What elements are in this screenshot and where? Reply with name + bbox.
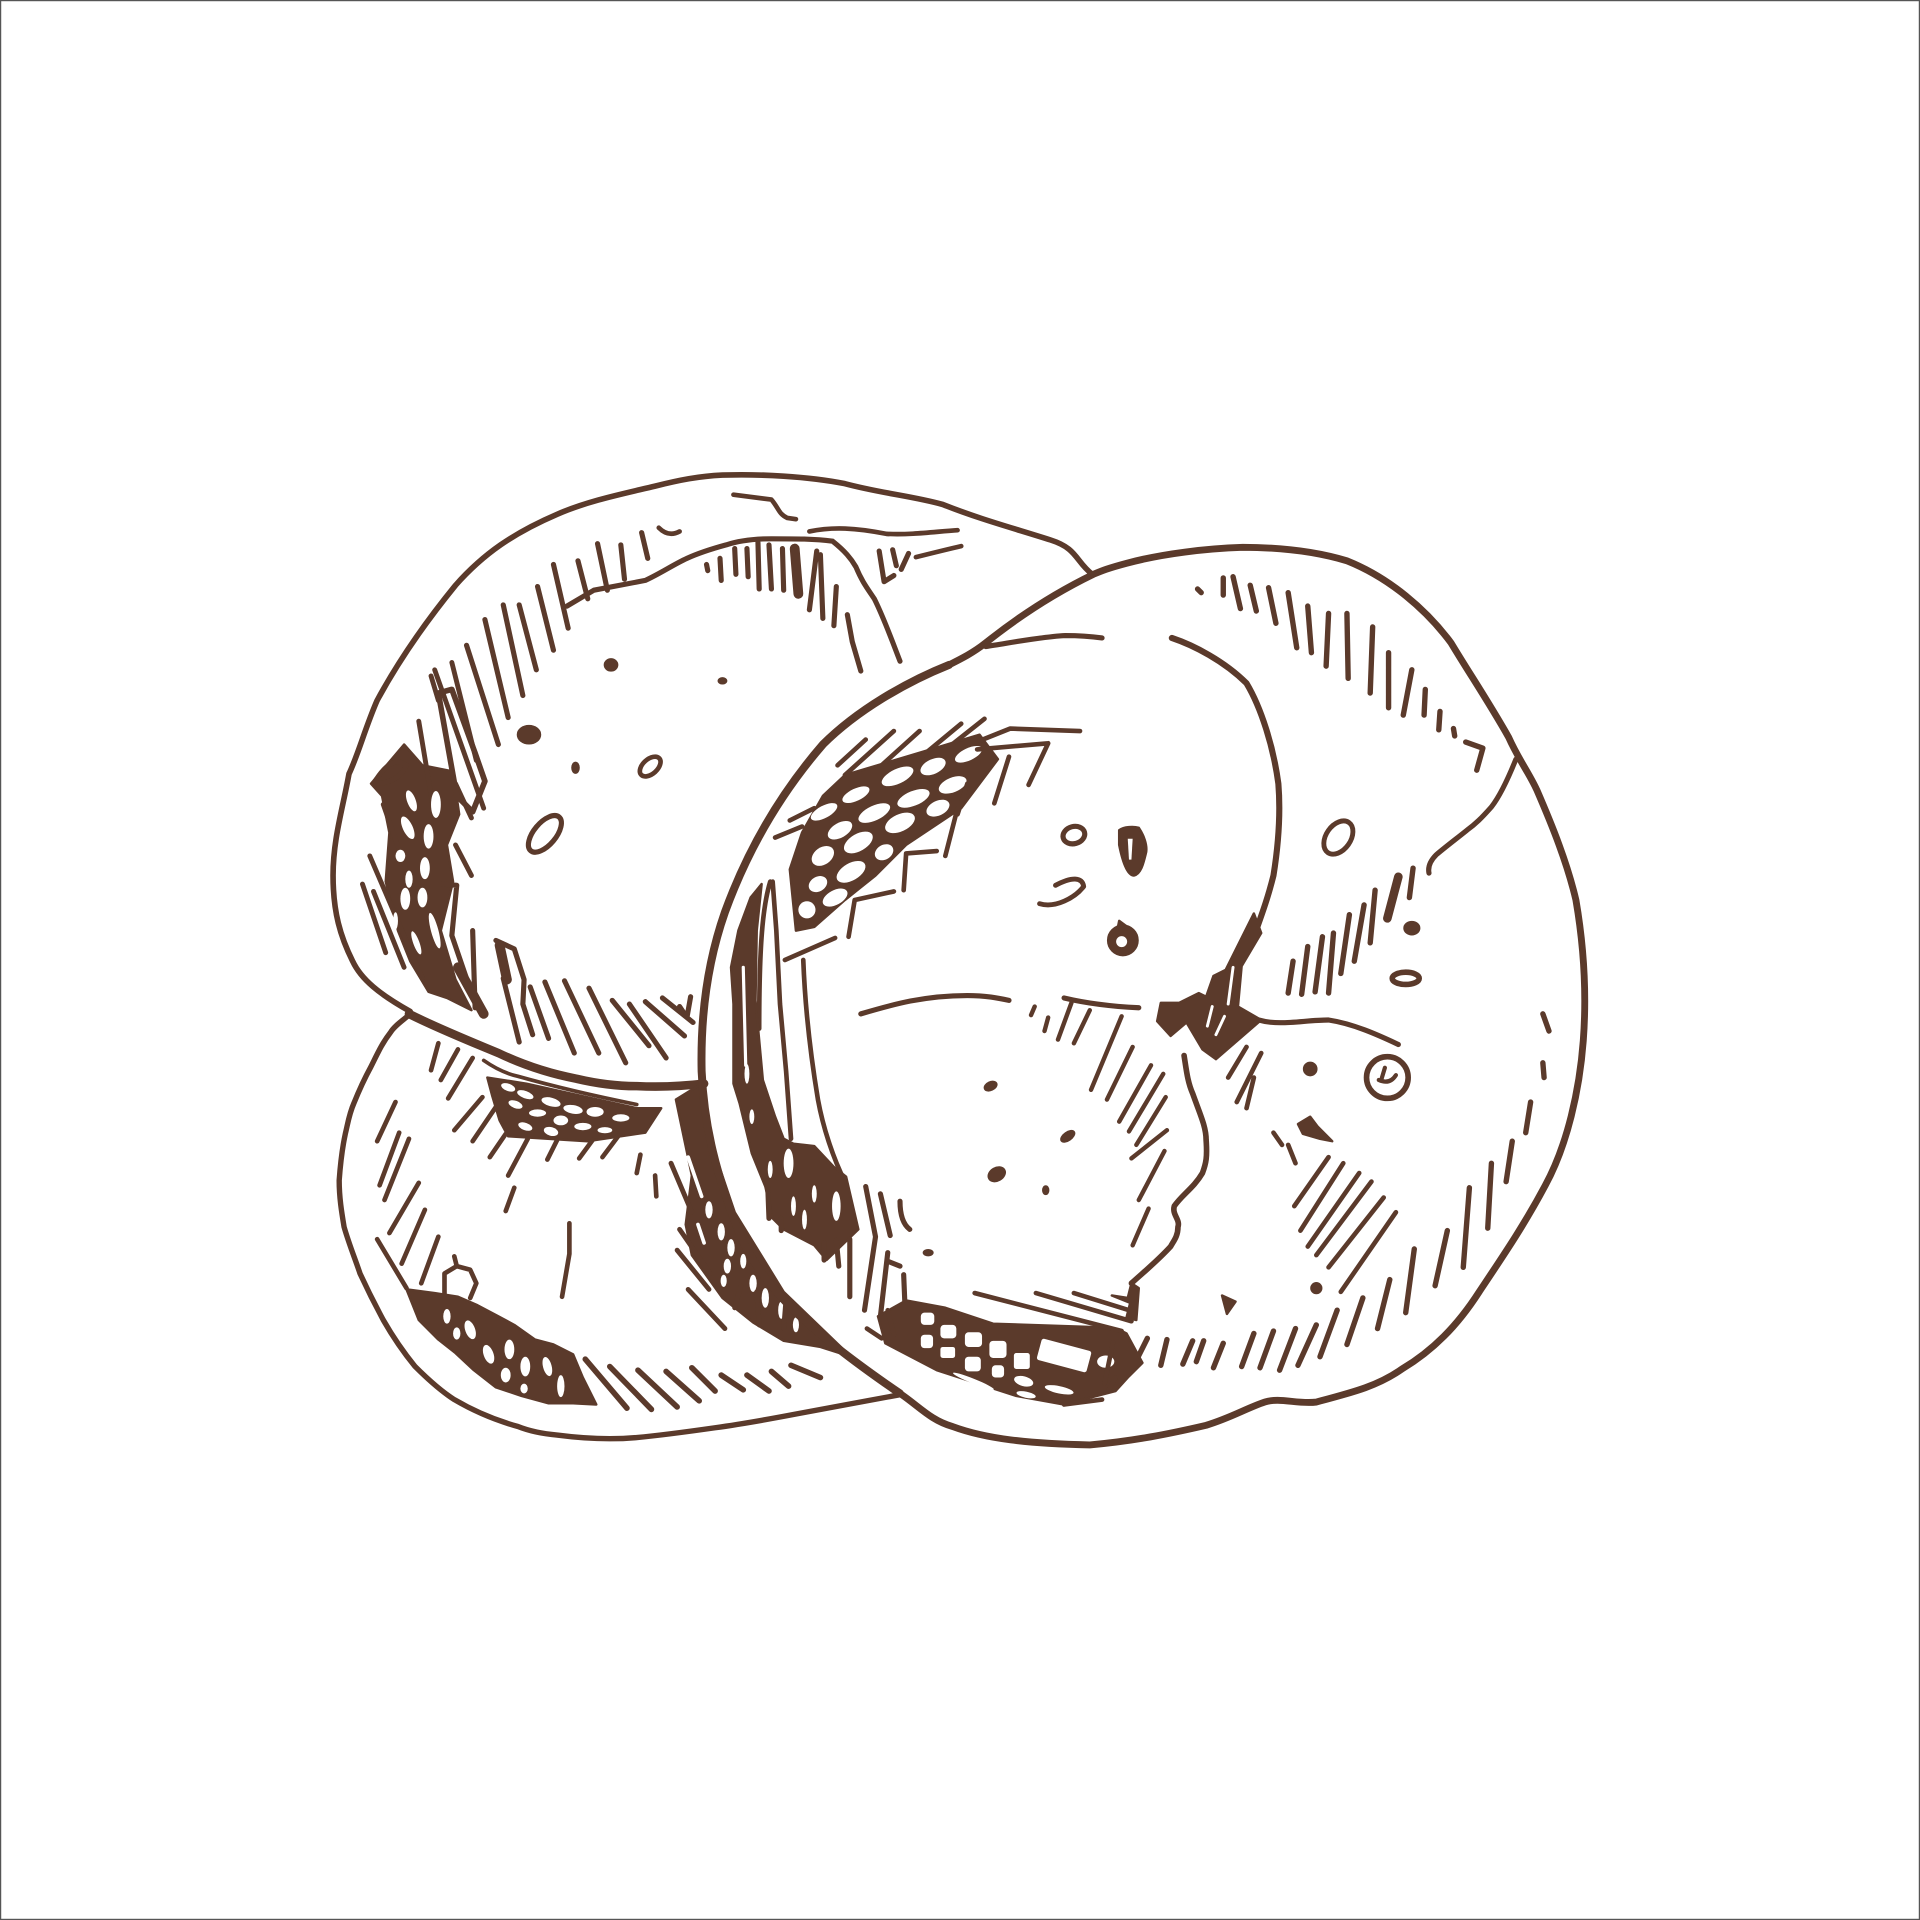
strip drips bbox=[768, 1187, 910, 1333]
lower left bun bbox=[339, 1014, 900, 1439]
bun notch bbox=[1112, 1283, 1139, 1320]
front bun left edge bbox=[702, 665, 949, 1393]
crumbs on right bun bbox=[1222, 815, 1419, 1314]
lower net bbox=[407, 1289, 596, 1404]
mesh dark body bbox=[371, 744, 471, 1010]
upper crown net bbox=[775, 719, 1080, 960]
crumbs on front bun bbox=[924, 824, 1146, 1255]
seam inner line bbox=[484, 1060, 637, 1104]
net dark body bbox=[790, 735, 998, 931]
lower left outline bbox=[339, 1015, 900, 1439]
main right outline bbox=[900, 547, 1585, 1445]
upper net band bbox=[487, 1078, 661, 1141]
mesh strokes bbox=[362, 662, 484, 978]
bottom strokes bbox=[585, 1359, 820, 1409]
dark center knot bbox=[1157, 913, 1261, 1059]
net white cells bbox=[798, 743, 984, 918]
grid overhang strokes bbox=[867, 1310, 1116, 1404]
right junction crease bbox=[1429, 759, 1516, 873]
top fold arch bbox=[567, 539, 900, 661]
right side strokes bbox=[1135, 1014, 1549, 1370]
net overhang strokes bbox=[775, 719, 1080, 960]
dark fold between buns bbox=[671, 1084, 851, 1357]
front right bun bbox=[702, 547, 1585, 1445]
left mesh shading bbox=[362, 662, 485, 1010]
mesh white cells bbox=[404, 789, 419, 813]
right diagonal hatching bbox=[1228, 1047, 1396, 1292]
illustration: bread bun sketch bbox=[333, 475, 1585, 1445]
crown right hatching bbox=[1031, 1003, 1167, 1245]
lines above grid bbox=[975, 1293, 1131, 1331]
bottom grid shading bbox=[867, 1300, 1142, 1404]
bottom hatching heavy bbox=[458, 945, 507, 1014]
center fold bbox=[1131, 1056, 1207, 1283]
back left bun bbox=[333, 475, 1092, 1063]
elongated hollow shape bbox=[438, 689, 485, 812]
top crease strokes bbox=[659, 495, 961, 557]
bottom hatching bbox=[442, 884, 693, 1063]
back left bun outline bbox=[333, 475, 1092, 1011]
fold side hatching bbox=[671, 1163, 786, 1329]
front strip lines bbox=[759, 882, 845, 1182]
hollow oval bbox=[373, 762, 407, 784]
upper right hatching bbox=[1198, 577, 1483, 770]
top arch hatching bbox=[467, 533, 909, 744]
arch hatching heavy stroke bbox=[795, 549, 798, 594]
heavy crease stroke bbox=[1387, 877, 1398, 918]
crumbs on back bun bbox=[518, 659, 726, 858]
fold line on crown bbox=[1172, 638, 1279, 937]
crown crease lines bbox=[861, 636, 1398, 1044]
thick upper seam bbox=[409, 1014, 704, 1087]
lower left hatching bbox=[377, 1043, 656, 1298]
dark left strip bbox=[731, 884, 858, 1260]
lower crease hatching bbox=[1288, 868, 1413, 994]
